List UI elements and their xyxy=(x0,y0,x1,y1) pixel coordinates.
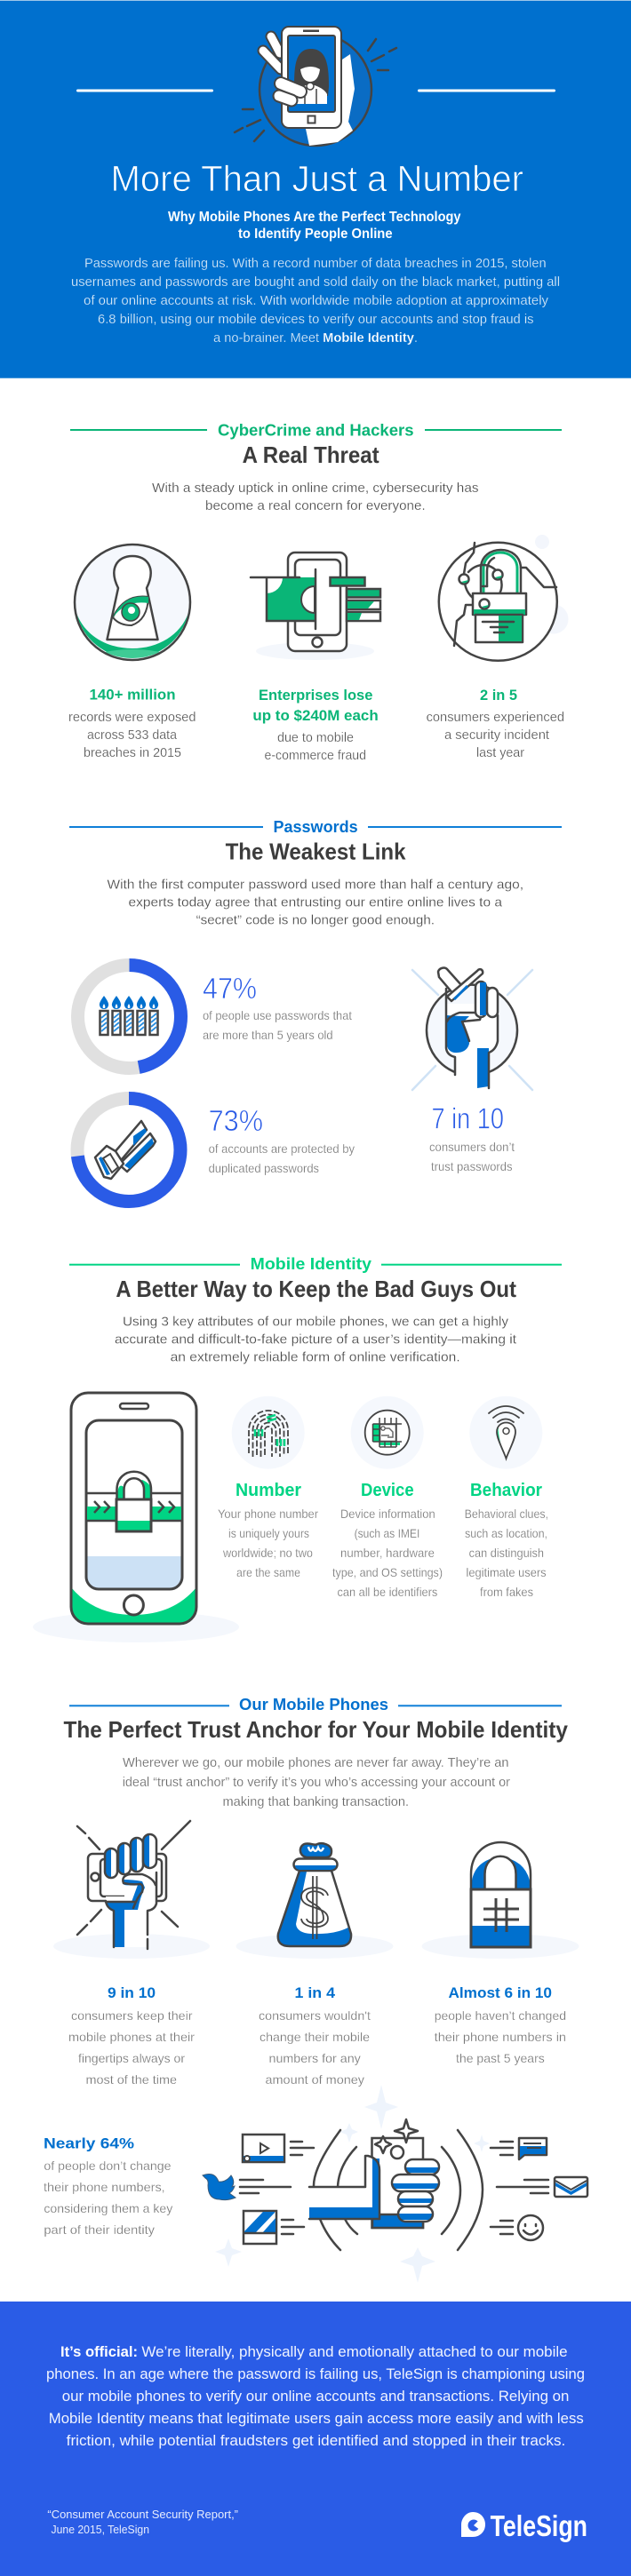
section rule left xyxy=(70,429,207,431)
stat: 47 percent: of people use passwords that xyxy=(203,1008,352,1022)
icon: fingerprint xyxy=(232,1396,305,1469)
panel: passwords xyxy=(69,818,562,1201)
column: behavior: can distinguish xyxy=(469,1546,544,1560)
closing statement: Mobile Identity means that legitimate users gain access more easily and with less xyxy=(49,2410,584,2427)
column: number: is uniquely yours xyxy=(228,1526,309,1540)
column: behavior: from fakes xyxy=(480,1585,533,1599)
stat: 140+ million: breaches in 2015 xyxy=(84,745,181,760)
section text xyxy=(115,1315,517,1365)
column: device: can all be identifiers xyxy=(338,1585,437,1599)
heading: A Real Threat xyxy=(243,441,379,468)
stat: 7 in 10 xyxy=(429,1102,515,1173)
stat: enterprises lose: up to $240M each xyxy=(252,707,379,724)
intro paragraph: a no-brainer. Meet Mobile Identity. xyxy=(213,330,418,346)
section text xyxy=(152,481,478,513)
stat: almost 6 in 10: their phone numbers in xyxy=(435,2030,566,2044)
icon: chat bubble xyxy=(491,2138,547,2159)
intro paragraph: of our online accounts at risk. With worldwide mobile adoption at approximately xyxy=(84,293,548,308)
stat: 140+ million: records were exposed xyxy=(68,710,196,725)
section text: Using 3 key attributes of our mobile phones, we can get a highly xyxy=(123,1315,509,1330)
icon: crossed fingers xyxy=(412,968,532,1090)
intro paragraph: usernames and passwords are bought and sold daily on the black market, putting all xyxy=(71,274,560,290)
section text: Wherever we go, our mobile phones are never far away. They’re an xyxy=(123,1755,508,1770)
logo: TeleSign xyxy=(461,2509,587,2542)
heading: The Weakest Link xyxy=(226,839,406,865)
subtitle: Why Mobile Phones Are the Perfect Technology xyxy=(168,210,461,225)
stat: 1 in 4: numbers for any xyxy=(268,2051,361,2065)
stat: 47 percent xyxy=(203,972,352,1042)
stat: 9 in 10: 9 in 10 xyxy=(108,1984,156,2001)
closing statement: phones. In an age where the password is failing us, TeleSign is championing using xyxy=(46,2365,585,2382)
stat: 1 in 4: consumers wouldn't xyxy=(259,2008,371,2023)
stat: 9 in 10: fingertips always or xyxy=(78,2051,185,2065)
stat: nearly 64 percent: part of their identity xyxy=(44,2222,155,2237)
stat: 2 in 5: 2 in 5 xyxy=(480,687,517,704)
stat: enterprises lose: due to mobile xyxy=(277,730,354,745)
column: number: worldwide; no two xyxy=(222,1546,313,1560)
panel: footer xyxy=(0,2302,631,2576)
donut: 73 percent xyxy=(77,1098,180,1201)
column: device: (such as IMEI xyxy=(355,1526,419,1540)
section rule right xyxy=(425,429,562,431)
stat: 73 percent: 73% xyxy=(209,1104,263,1137)
stat: 2 in 5: a security incident xyxy=(444,727,550,743)
stat: enterprises lose: Enterprises lose xyxy=(259,687,372,704)
section label: Our Mobile Phones xyxy=(239,1696,388,1713)
stat: almost 6 in 10: Almost 6 in 10 xyxy=(448,1984,552,2001)
subtitle: to Identify People Online xyxy=(238,227,393,242)
stat: enterprises lose xyxy=(252,687,379,763)
stat: 9 in 10: most of the time xyxy=(85,2072,177,2087)
stat: 140+ million: across 533 data xyxy=(87,727,178,743)
intro paragraph xyxy=(71,256,560,346)
section label: Mobile Identity xyxy=(251,1255,371,1273)
stat: 73 percent: duplicated passwords xyxy=(209,1161,319,1175)
icon: connected phone in hand xyxy=(203,2085,587,2283)
intro paragraph: 6.8 billion, using our mobile devices to verify our accounts and stop fraud is xyxy=(98,312,533,327)
icon: phone with lock xyxy=(33,1393,239,1642)
section rule right xyxy=(398,1705,562,1706)
section label: Passwords xyxy=(274,818,358,836)
icon: birthday candles xyxy=(100,996,158,1035)
closing statement: We’re literally, physically and emotionally attached to our mobile xyxy=(141,2343,568,2360)
icon: duplicate keys xyxy=(95,1121,156,1179)
intro paragraph: Passwords are failing us. With a record number of data breaches in 2015, stolen xyxy=(84,256,547,271)
icon: mail xyxy=(497,2177,587,2197)
icon: keyhole eye xyxy=(75,545,190,660)
column: number: are the same xyxy=(236,1565,300,1579)
heading: The Perfect Trust Anchor for Your Mobile Identity xyxy=(64,1716,568,1743)
stat: almost 6 in 10: the past 5 years xyxy=(456,2051,545,2065)
section text: With a steady uptick in online crime, cybersecurity has xyxy=(152,481,478,496)
column: number: Your phone number xyxy=(218,1507,318,1521)
decorative rule: header right xyxy=(418,89,555,92)
stat: 73 percent xyxy=(209,1104,355,1175)
icon: selfie phone in hand xyxy=(235,27,396,146)
icon: smile xyxy=(491,2215,543,2240)
stat: nearly 64 percent: of people don’t change xyxy=(44,2159,172,2173)
title: More Than Just a Number xyxy=(110,158,523,199)
section text xyxy=(123,1755,510,1809)
column: behavior: Behavioral clues, xyxy=(465,1507,548,1521)
closing statement: It’s official: xyxy=(60,2343,138,2360)
stat: 47 percent: are more than 5 years old xyxy=(203,1028,332,1042)
section text: experts today agree that entrusting our entire online lives to a xyxy=(128,895,503,910)
column: behavior: legitimate users xyxy=(466,1565,547,1579)
section rule left xyxy=(69,1705,229,1706)
stat: nearly 64 percent: considering them a key xyxy=(44,2201,172,2215)
section text: “secret” code is no longer good enough. xyxy=(196,913,435,928)
stat: 9 in 10 xyxy=(68,1984,195,2087)
heading: A Better Way to Keep the Bad Guys Out xyxy=(116,1276,516,1302)
stat: 9 in 10: mobile phones at their xyxy=(68,2030,195,2044)
icon: bird xyxy=(203,2174,291,2200)
section rule left xyxy=(69,826,263,828)
section text: making that banking transaction. xyxy=(222,1794,409,1809)
icon: money bag xyxy=(236,1843,393,1959)
column: device: type, and OS settings) xyxy=(332,1565,443,1579)
stat: 2 in 5 xyxy=(427,687,564,760)
column: number: Number xyxy=(236,1481,301,1500)
stat: enterprises lose: e-commerce fraud xyxy=(265,748,366,763)
closing statement xyxy=(46,2343,585,2449)
stat: 2 in 5: last year xyxy=(476,745,524,760)
stat: 7 in 10: consumers don’t xyxy=(429,1140,515,1154)
icon: video xyxy=(243,2135,314,2162)
stat: 7 in 10: trust passwords xyxy=(431,1159,512,1173)
stat: almost 6 in 10: people haven’t changed xyxy=(435,2008,566,2023)
section text: become a real concern for everyone. xyxy=(205,498,426,513)
stat: almost 6 in 10 xyxy=(435,1984,566,2065)
section rule right xyxy=(368,826,562,828)
panel: header xyxy=(0,0,631,378)
stat: 2 in 5: consumers experienced xyxy=(427,710,564,725)
decorative rule: header left xyxy=(76,89,213,92)
citation xyxy=(47,2508,238,2536)
column: number xyxy=(218,1481,318,1579)
stat: nearly 64 percent: Nearly 64% xyxy=(44,2135,134,2152)
section text: With the first computer password used more than half a century ago, xyxy=(107,878,523,893)
section text: ideal “trust anchor” to verify it’s you who’s accessing your account or xyxy=(123,1775,510,1790)
stat: nearly 64 percent xyxy=(44,2135,172,2237)
donut: 47 percent xyxy=(78,965,181,1068)
stat: 73 percent: of accounts are protected by xyxy=(209,1141,355,1156)
column: behavior: such as location, xyxy=(465,1526,547,1540)
stat: 1 in 4 xyxy=(259,1984,371,2087)
logo: TeleSign: TeleSign xyxy=(491,2509,587,2542)
column: device: Device information xyxy=(340,1507,435,1521)
closing statement: our mobile phones to verify our online accounts and transactions. Relying on xyxy=(62,2388,569,2405)
stat: 140+ million xyxy=(68,687,196,760)
section rule left xyxy=(69,1264,240,1266)
section rule right xyxy=(381,1264,562,1266)
column: device: number, hardware xyxy=(340,1546,435,1560)
subtitle xyxy=(168,210,461,242)
stat: 9 in 10: consumers keep their xyxy=(71,2008,193,2023)
icon: photo xyxy=(244,2211,304,2244)
stat: 7 in 10: 7 in 10 xyxy=(432,1102,504,1135)
column: device: Device xyxy=(361,1481,414,1500)
citation: “Consumer Account Security Report,” xyxy=(47,2508,238,2521)
icon: padlock with hash xyxy=(421,1842,579,1959)
closing statement: friction, while potential fraudsters get identified and stopped in their tracks. xyxy=(67,2432,565,2449)
icon: money through phone xyxy=(251,553,380,660)
icon: fist holding phone xyxy=(53,1821,210,1959)
stat: 47 percent: 47% xyxy=(203,972,257,1005)
stat: 1 in 4: change their mobile xyxy=(260,2030,370,2044)
stat: nearly 64 percent: their phone numbers, xyxy=(44,2180,165,2194)
stat: 140+ million: 140+ million xyxy=(89,687,176,704)
stat: 1 in 4: amount of money xyxy=(265,2072,364,2087)
section label: CyberCrime and Hackers xyxy=(218,422,414,440)
column: behavior xyxy=(465,1481,548,1599)
icon: device chip xyxy=(351,1396,424,1469)
icon: padlock circuit xyxy=(439,535,569,661)
stat: 1 in 4: 1 in 4 xyxy=(295,1984,336,2001)
section text: an extremely reliable form of online verification. xyxy=(171,1350,460,1365)
panel: our mobile phones xyxy=(44,1696,587,2283)
panel: mobile identity xyxy=(33,1255,562,1642)
citation: June 2015, TeleSign xyxy=(52,2523,149,2536)
icon: location signal xyxy=(469,1396,542,1469)
section text xyxy=(107,878,523,928)
panel: cybercrime and hackers xyxy=(68,422,569,763)
column: behavior: Behavior xyxy=(470,1481,542,1500)
column: device xyxy=(332,1481,443,1599)
section text: accurate and difficult-to-fake picture of a user’s identity—making it xyxy=(115,1332,517,1348)
